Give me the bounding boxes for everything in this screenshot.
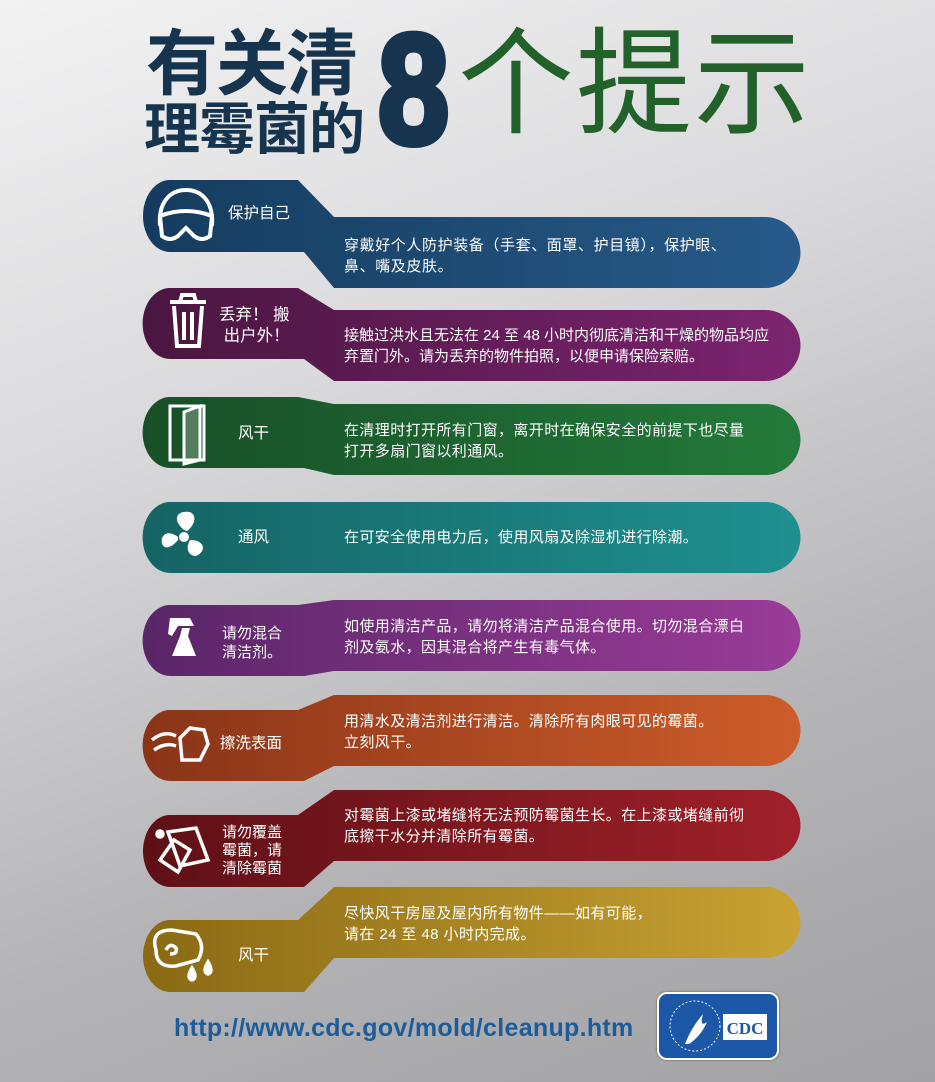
icon: towel and drops bbox=[155, 930, 211, 980]
label 5: 清洁剂。 bbox=[222, 644, 282, 661]
label 2: 出户外！ bbox=[224, 327, 290, 345]
label 5: 请勿混合 bbox=[222, 625, 282, 642]
label 7: 清除霉菌 bbox=[222, 860, 282, 877]
text 8: 请在 24 至 48 小时内完成。 bbox=[344, 926, 536, 943]
row 4 shape bbox=[143, 502, 801, 573]
icon: CDC logo bbox=[657, 992, 779, 1060]
icon: trash bbox=[170, 295, 206, 346]
text 6: 立刻风干。 bbox=[344, 734, 421, 751]
label 5 bbox=[222, 625, 282, 661]
label 7: 请勿覆盖 bbox=[222, 824, 282, 841]
label 3: 风干 bbox=[238, 425, 269, 442]
row 7 shape bbox=[143, 790, 800, 887]
text 2: 接触过洪水且无法在 24 至 48 小时内彻底清洁和干燥的物品均应 bbox=[344, 327, 769, 344]
label 4: 通风 bbox=[238, 529, 269, 546]
title tail: 个提示 bbox=[458, 19, 812, 149]
row 2 shape bbox=[143, 288, 801, 381]
row 8 shape bbox=[143, 887, 800, 992]
text 6: 用清水及清洁剂进行清洁。清除所有肉眼可见的霉菌。 bbox=[344, 713, 714, 730]
text 5 bbox=[344, 618, 744, 656]
icon: wiping hand bbox=[152, 728, 208, 760]
text 8 bbox=[344, 905, 652, 943]
label 7 bbox=[222, 824, 282, 877]
text 2: 弃置门外。请为丢弃的物件拍照，以便申请保险索赔。 bbox=[344, 348, 704, 365]
icon: CDC logo: CDC bbox=[727, 1019, 763, 1038]
big number 8: 8 bbox=[378, 3, 449, 177]
text 5: 如使用清洁产品，请勿将清洁产品混合使用。切勿混合漂白 bbox=[344, 618, 744, 635]
text 3: 在清理时打开所有门窗，离开时在确保安全的前提下也尽量 bbox=[344, 422, 744, 439]
row 5 shape bbox=[143, 600, 801, 676]
text 1: 鼻、嘴及皮肤。 bbox=[344, 258, 453, 275]
label 2 bbox=[219, 306, 290, 345]
text 5: 剂及氨水，因其混合将产生有毒气体。 bbox=[344, 639, 606, 656]
text 1: 穿戴好个人防护装备（手套、面罩、护目镜），保护眼、 bbox=[344, 237, 727, 254]
row 3 shape bbox=[143, 397, 801, 475]
icon: door bbox=[170, 406, 204, 464]
row 1 shape bbox=[143, 180, 800, 288]
text 3: 打开多扇门窗以利通风。 bbox=[344, 443, 513, 460]
text 1 bbox=[344, 237, 727, 275]
label 6: 擦洗表面 bbox=[220, 735, 282, 752]
text 7: 对霉菌上漆或堵缝将无法预防霉菌生长。在上漆或堵缝前彻 bbox=[344, 807, 744, 824]
label 7: 霉菌，请 bbox=[222, 842, 282, 859]
icon: spray bottle bbox=[168, 618, 196, 656]
text 7 bbox=[344, 807, 744, 845]
text 3 bbox=[344, 422, 744, 460]
title line 2: 理霉菌的 bbox=[144, 98, 364, 161]
row 6 shape bbox=[143, 695, 801, 781]
label 1: 保护自己 bbox=[228, 205, 290, 222]
title line 1: 有关清 bbox=[146, 25, 356, 105]
text 6 bbox=[344, 713, 714, 751]
text 4: 在可安全使用电力后，使用风扇及除湿机进行除潮。 bbox=[344, 529, 698, 546]
icon: goggles bbox=[160, 190, 212, 239]
label 8: 风干 bbox=[238, 947, 269, 964]
text 8: 尽快风干房屋及屋内所有物件——如有可能， bbox=[344, 905, 652, 922]
icon: fan bbox=[162, 512, 203, 556]
title bbox=[144, 3, 812, 177]
url: http://www.cdc.gov/mold/cleanup.htm bbox=[174, 1014, 634, 1042]
label 2: 丢弃！ 搬 bbox=[219, 306, 290, 324]
text 2 bbox=[344, 327, 769, 365]
text 7: 底擦干水分并清除所有霉菌。 bbox=[344, 828, 544, 845]
icon: hand with sponge bbox=[157, 828, 208, 872]
